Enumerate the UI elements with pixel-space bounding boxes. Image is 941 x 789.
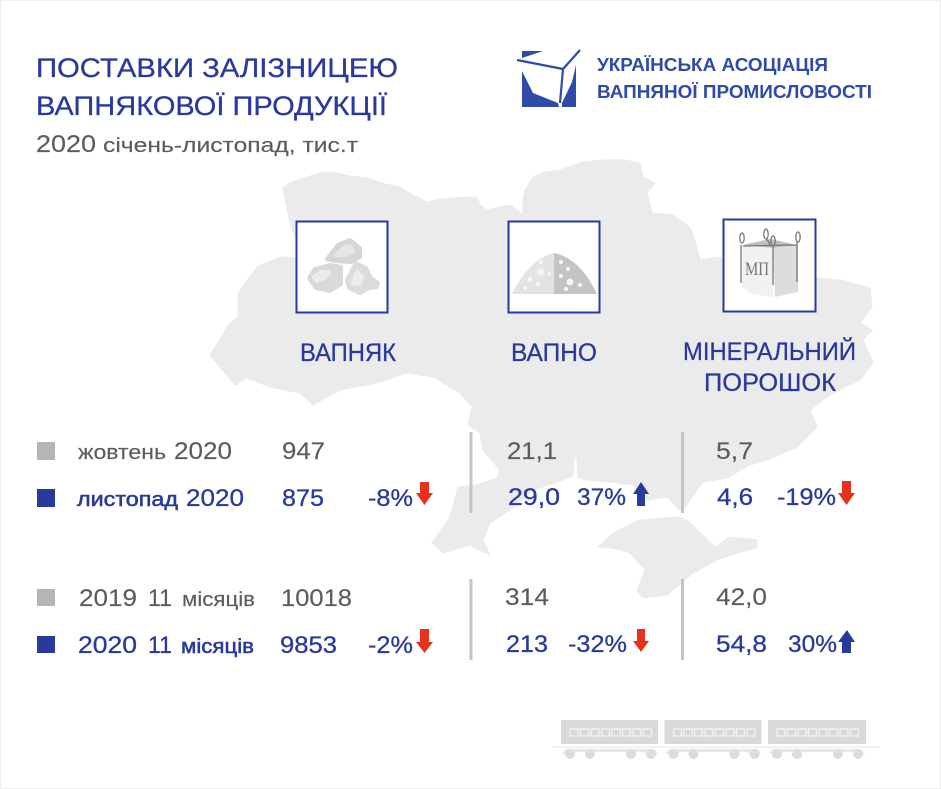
row: 2019 eleven months: місяців <box>182 589 255 611</box>
row: 2019 eleven months: 314 <box>505 584 549 611</box>
arrow: limestone 11 months down <box>416 629 433 653</box>
icon box: big bag: МП <box>745 259 769 280</box>
row: 2020 eleven months: 11 <box>148 632 172 659</box>
train illustration <box>553 720 880 759</box>
row: 2020 eleven months: 54,8 <box>716 631 767 658</box>
row: 2020 eleven months: місяців <box>181 636 254 658</box>
row: 2020 eleven months: 213 <box>506 631 548 658</box>
row: November 2020: 29,0 <box>508 484 560 511</box>
row: 2020 eleven months: 9853 <box>280 632 337 659</box>
Crimea <box>598 517 757 598</box>
row: October 2020: 2020 <box>174 438 232 465</box>
row: November 2020: 4,6 <box>717 484 753 511</box>
icon box: lime heap <box>508 222 600 312</box>
icon box: big bag <box>724 220 816 312</box>
title: ВАПНЯКОВОЇ ПРОДУКЦІЇ <box>36 91 388 121</box>
row: 2020 eleven months: -32% <box>568 631 627 658</box>
column heading: mineral powder: ПОРОШОК <box>704 369 836 397</box>
row: November 2020: 875 <box>282 485 324 512</box>
row: 2019 eleven months: 10018 <box>281 585 352 612</box>
row: 2019 eleven months: 11 <box>148 585 172 612</box>
arrow: lime 11 months down <box>633 629 649 652</box>
row: October 2020 <box>37 438 753 465</box>
title <box>36 53 398 121</box>
arrow: powder November down <box>838 481 855 505</box>
row: 2020 eleven months: -2% <box>368 632 413 659</box>
logo text: ВАПНЯНОЇ ПРОМИСЛОВОСТІ <box>597 81 872 102</box>
row: November 2020: -19% <box>777 484 836 511</box>
map of Ukraine background <box>210 160 873 598</box>
column heading: lime: ВАПНО <box>511 339 597 367</box>
column heading: mineral powder: МІНЕРАЛЬНИЙ <box>683 336 856 366</box>
logo text: УКРАЇНСЬКА АСОЦІАЦІЯ <box>597 54 828 75</box>
row: November 2020: -8% <box>368 485 413 512</box>
icon box: limestone <box>296 222 388 312</box>
column dividers <box>470 432 684 660</box>
row: 2020 eleven months: 30% <box>788 631 837 658</box>
row: 2020 eleven months: 2020 <box>78 632 137 659</box>
arrow: limestone November down <box>416 482 433 505</box>
logo text <box>597 54 872 102</box>
row: November 2020: листопад <box>77 489 178 511</box>
title: ПОСТАВКИ ЗАЛІЗНИЦЕЮ <box>36 53 398 83</box>
row: October 2020: 947 <box>282 438 325 465</box>
row: November 2020 <box>37 484 836 512</box>
arrow: lime November up <box>633 482 649 506</box>
logo icon <box>517 50 580 107</box>
row: November 2020: 37% <box>577 484 626 511</box>
column heading: limestone: ВАПНЯК <box>300 339 396 367</box>
row: October 2020: 21,1 <box>507 438 557 465</box>
subtitle: 2020 <box>36 131 96 158</box>
row: October 2020: 5,7 <box>716 438 753 465</box>
row: October 2020: жовтень <box>78 442 166 464</box>
arrow: powder 11 months up <box>838 630 855 653</box>
column heading: mineral powder <box>683 336 856 397</box>
subtitle: січень-листопад, тис.т <box>103 135 358 157</box>
row: 2019 eleven months <box>37 584 767 612</box>
row: 2019 eleven months: 2019 <box>79 585 137 612</box>
subtitle <box>36 131 358 158</box>
row: 2020 eleven months <box>37 631 837 659</box>
row: 2019 eleven months: 42,0 <box>716 584 767 611</box>
row: November 2020: 2020 <box>186 485 244 512</box>
